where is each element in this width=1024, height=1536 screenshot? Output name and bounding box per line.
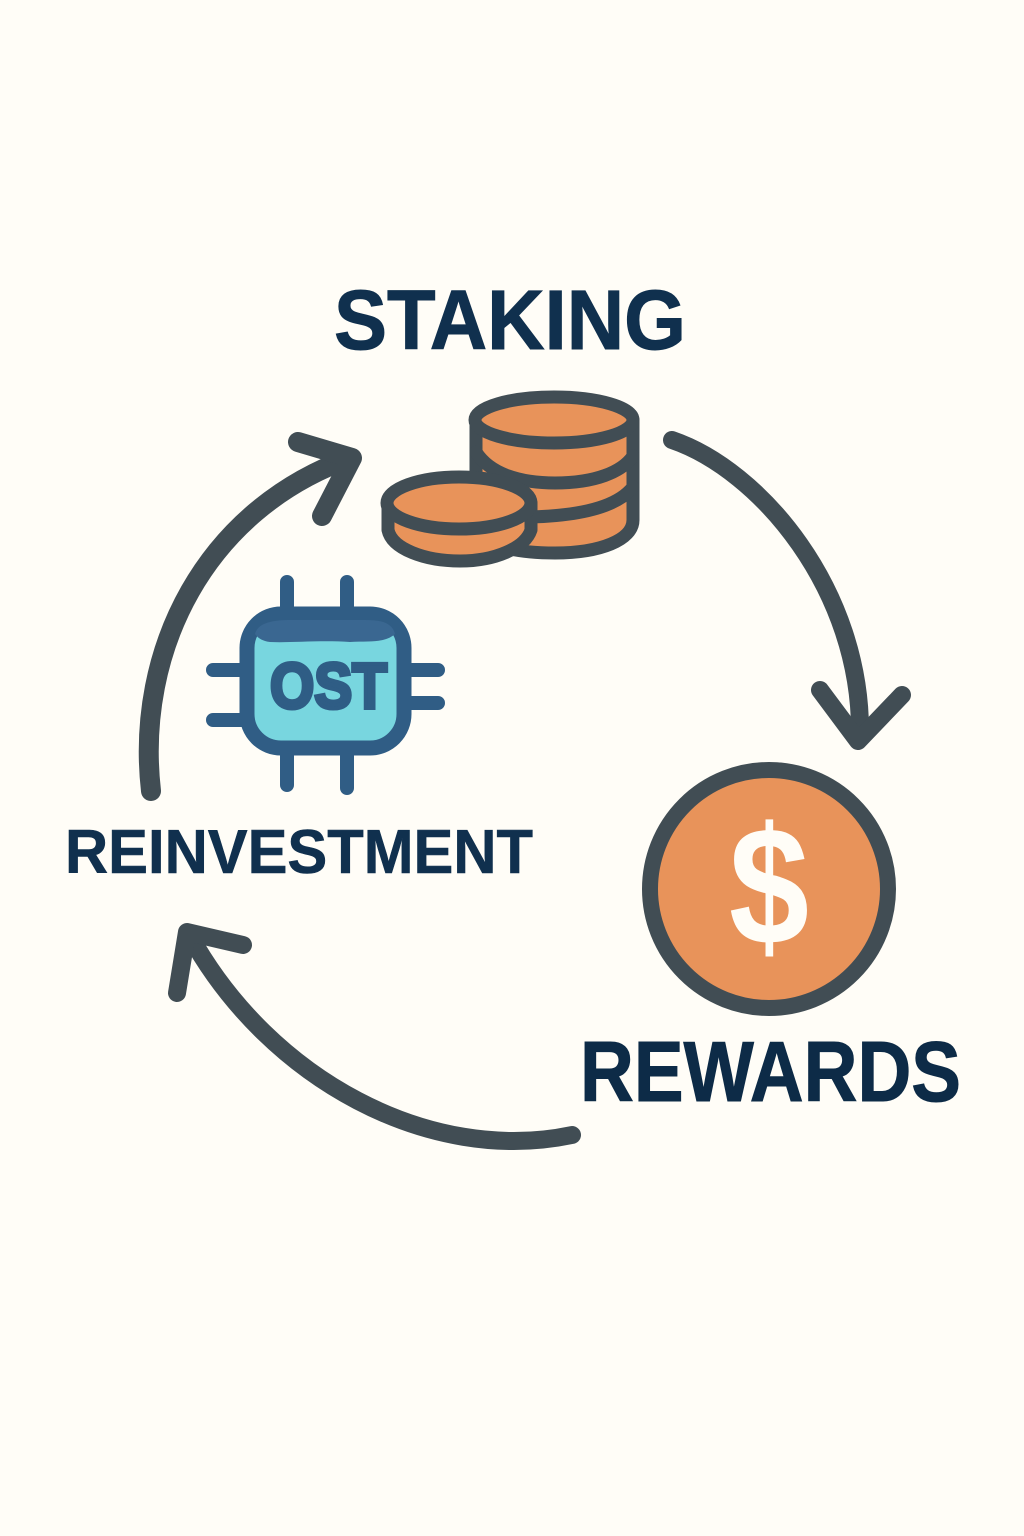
arrow: reinvestment to staking — [149, 442, 352, 791]
icon: OST chip: OST — [270, 650, 387, 722]
icon: OST chip — [213, 582, 438, 788]
icon: dollar coin — [650, 770, 888, 1008]
heading: rewards: REWARDS — [580, 1025, 961, 1120]
arrow: rewards to reinvestment — [177, 932, 572, 1141]
heading: staking: STAKING — [334, 273, 686, 367]
arrow: staking to rewards — [672, 440, 902, 741]
heading: reinvestment: REINVESTMENT — [65, 818, 533, 887]
icon: dollar coin: $ — [729, 792, 809, 980]
icon: coin stacks — [387, 397, 633, 561]
